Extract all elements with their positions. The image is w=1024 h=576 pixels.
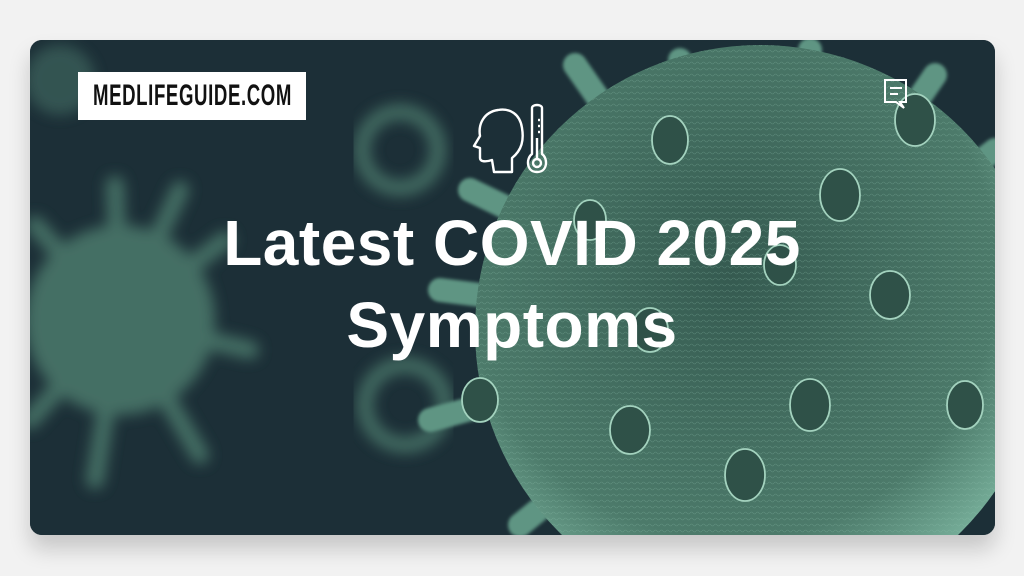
blurred left virus	[25, 45, 250, 480]
title: Latest COVID 2025	[223, 207, 801, 279]
icon: head with thermometer	[472, 104, 548, 174]
big virus	[430, 45, 1024, 576]
logo: medlifeguide.com: MEDLIFEGUIDE.COM	[92, 79, 292, 112]
icon: chat note	[884, 79, 907, 109]
title: Symptoms	[346, 289, 678, 361]
title	[223, 207, 801, 361]
logo: medlifeguide.com	[78, 72, 306, 120]
